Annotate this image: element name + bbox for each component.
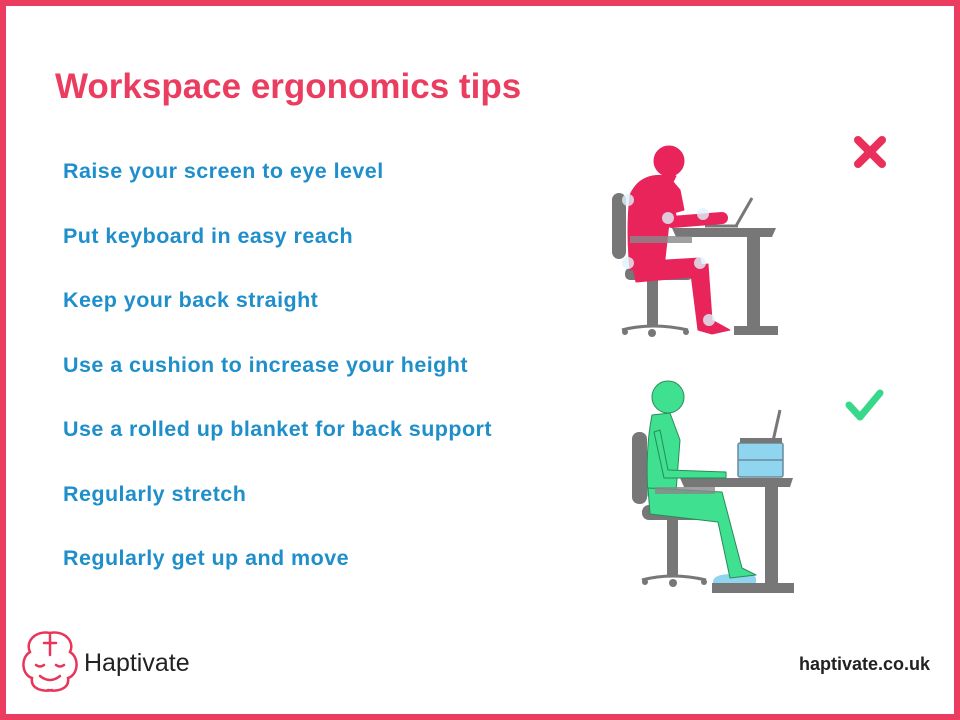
tips list: Raise your screen to eye level [63, 159, 384, 183]
icon: cross [858, 140, 882, 164]
good posture figure [632, 381, 794, 593]
icon: brain logo [23, 633, 77, 691]
tips list: Regularly stretch [63, 482, 246, 506]
bad posture figure [612, 146, 778, 337]
tips list: Use a cushion to increase your height [63, 352, 468, 376]
title: Workspace ergonomics tips [55, 67, 521, 106]
tips list: Put keyboard in easy reach [63, 224, 353, 248]
tips list: Regularly get up and move [63, 546, 349, 570]
brand name: Haptivate [84, 649, 190, 677]
tips list [63, 159, 492, 570]
icon: check [849, 393, 880, 417]
website url: haptivate.co.uk [799, 654, 930, 674]
tips list: Keep your back straight [63, 288, 318, 312]
tips list: Use a rolled up blanket for back support [63, 417, 492, 441]
